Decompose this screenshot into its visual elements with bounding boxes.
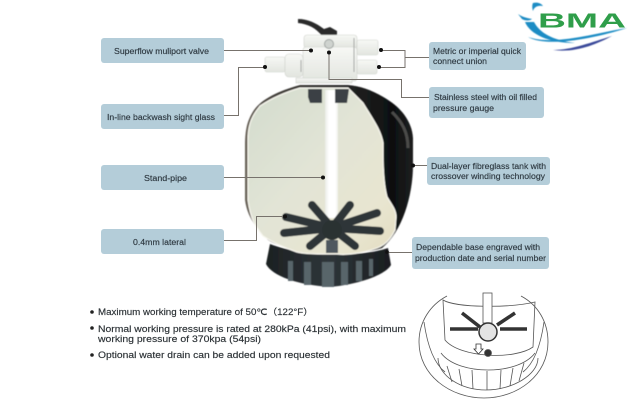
black tank sheen (392, 112, 408, 148)
label: Superflow muliport valve (101, 38, 224, 63)
label: Stand-pipe (101, 165, 224, 190)
label: Superflow muliport valve: Superflow muliport valve (114, 47, 210, 56)
label: Dual-layer fibreglass tank: Dual-layer fibreglass tank with (431, 162, 546, 171)
specification bullets (90, 307, 406, 360)
specification bullets: Normal working pressure is rated at 280kPa (41psi), with maximum (98, 324, 406, 334)
logo: BMA: BMA (538, 10, 626, 32)
leader: quick connect union (377, 48, 429, 69)
laterals (284, 205, 380, 246)
label: Stand-pipe: Stand-pipe (144, 174, 188, 183)
label: Dual-layer fibreglass tank: crossover winding technology (431, 172, 545, 181)
leader: pressure gauge (327, 50, 429, 98)
leader: fibreglass tank (411, 164, 427, 168)
logo: BMA (518, 3, 627, 51)
label: Stainless steel with oil filled pressure gauge: pressure gauge (433, 104, 495, 113)
label: Dual-layer fibreglass tank (427, 157, 550, 185)
label: Metric or imperial quick connect union (429, 42, 526, 70)
leader: multiport valve (224, 48, 313, 52)
specification bullets: Maximum working temperature of 50℃（122°F） (98, 307, 313, 317)
leader: base (385, 250, 412, 254)
leader: stand-pipe (224, 176, 325, 180)
tank photo: cutaway filter (245, 19, 413, 287)
label: Stainless steel with oil filled pressure gauge (429, 87, 544, 118)
drain detail drawing (419, 293, 548, 398)
label: Dependable base (412, 237, 549, 269)
specification bullets: Optional water drain can be added upon requested (98, 350, 330, 360)
leader: sight glass (224, 65, 267, 116)
label: Metric or imperial quick connect union: connect union (433, 57, 487, 66)
inner liner (248, 88, 396, 254)
label: In-line backwash sight glass (101, 104, 224, 129)
label: Metric or imperial quick connect union: Metric or imperial quick (433, 47, 522, 56)
stand-pipe (325, 90, 338, 218)
specification bullets: working pressure of 370kpa (54psi) (97, 334, 261, 344)
handle (298, 19, 337, 36)
multiport valve (265, 35, 378, 83)
label: In-line backwash sight glass: In-line backwash sight glass (107, 113, 215, 122)
base ring (266, 244, 391, 287)
label: Dependable base: Dependable base engraved with (416, 243, 540, 252)
label: 0.4mm lateral (101, 229, 224, 254)
fibreglass tank body (245, 85, 413, 254)
leader: lateral (224, 214, 287, 240)
pipe brackets (308, 89, 349, 103)
label: 0.4mm lateral: 0.4mm lateral (133, 238, 186, 247)
label: Dependable base: production date and serial number (415, 254, 546, 263)
label: Stainless steel with oil filled pressure gauge: Stainless steel with oil filled (434, 93, 537, 102)
